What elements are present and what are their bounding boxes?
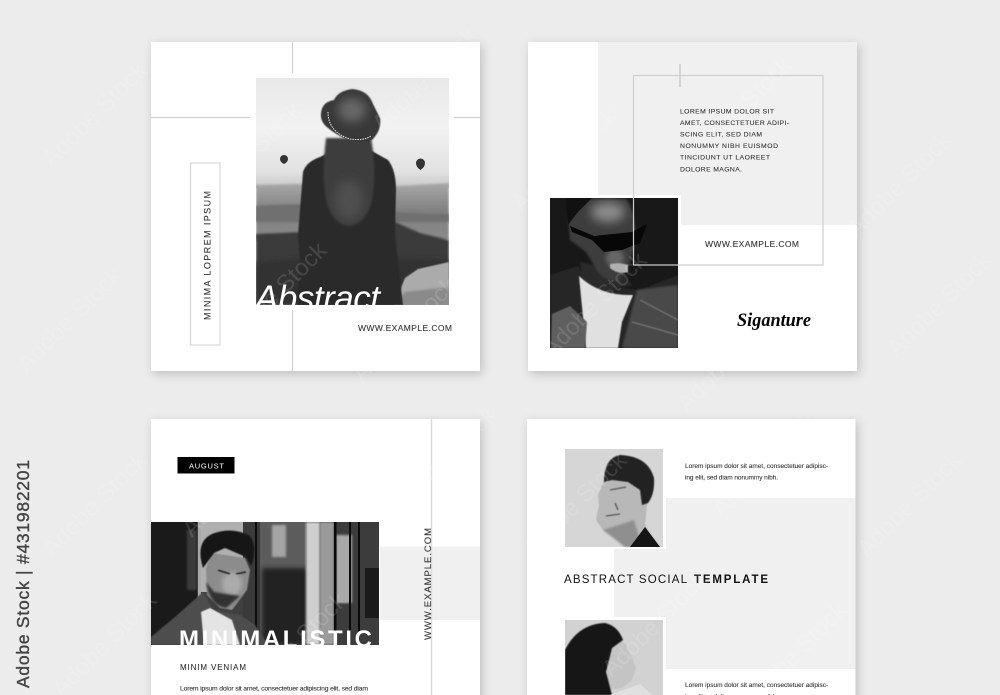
panel: card 3 minimalistic xyxy=(151,419,480,695)
frame with text xyxy=(634,64,823,265)
watermark pattern: Adobe Stock xyxy=(537,246,653,362)
heading: MINIMALISTIC: MINIMALISTIC xyxy=(179,626,372,653)
stock id credit: Adobe Stock | #431982201 xyxy=(13,460,33,688)
watermark pattern: Adobe Stock xyxy=(37,56,153,172)
photo: woman in profile xyxy=(565,620,663,695)
date tag xyxy=(178,457,234,474)
paragraph: TINCIDUNT UT LAOREET xyxy=(680,154,770,162)
signature: Siganture xyxy=(737,310,812,331)
watermark pattern: Adobe Stock xyxy=(682,51,798,167)
photo: man with sunglasses xyxy=(550,198,678,348)
watermark pattern: Adobe Stock xyxy=(842,126,958,242)
paragraph xyxy=(685,463,828,482)
paragraph xyxy=(680,108,789,174)
watermark pattern: Adobe Stock xyxy=(367,21,483,137)
body text: Lorem ipsum dolor sit amet, consectetuer adipiscing elit, sed diam xyxy=(180,686,368,692)
watermark pattern: Adobe Stock xyxy=(347,271,463,387)
url text: WWW.EXAMPLE.COM xyxy=(705,239,799,249)
paragraph: ing elit, sed diam nonummy nibh. xyxy=(685,474,778,482)
panel: card 1 hat photo post xyxy=(151,42,480,371)
vertical url: WWW.EXAMPLE.COM xyxy=(423,528,434,640)
watermark pattern: Adobe Stock xyxy=(507,101,623,217)
paragraph: SCING ELIT, SED DIAM xyxy=(680,132,762,138)
paragraph: Lorem ipsum dolor sit amet, consectetuer adipisc- xyxy=(685,463,828,470)
photo: man in profile xyxy=(565,449,663,547)
paragraph xyxy=(685,682,828,695)
url text: WWW.EXAMPLE.COM xyxy=(358,323,452,333)
icon: right balloon xyxy=(416,158,425,170)
paragraph: LOREM IPSUM DOLOR SIT xyxy=(680,108,774,116)
watermark pattern: Adobe Stock xyxy=(597,566,713,682)
paragraph: AMET, CONSECTETUER ADIPI- xyxy=(680,120,789,127)
heading: abstract social template: ABSTRACT SOCIAL xyxy=(564,574,688,586)
paragraph: DOLORE MAGNA. xyxy=(680,166,742,174)
watermark pattern: Adobe Stock xyxy=(707,406,823,522)
icon: left balloon xyxy=(280,155,288,164)
watermark pattern: Adobe Stock xyxy=(387,401,503,517)
watermark pattern: Adobe Stock xyxy=(882,246,998,362)
heading: Abstract: Abstract xyxy=(253,279,381,318)
paragraph: NONUMMY NIBH EUISMOD xyxy=(680,143,778,150)
date tag: AUGUST xyxy=(189,462,224,470)
heading: abstract social template: TEMPLATE xyxy=(694,574,768,586)
vertical label box xyxy=(190,163,220,345)
heading: abstract social template xyxy=(564,574,768,586)
watermark pattern: Adobe Stock xyxy=(852,446,968,562)
watermark pattern: Adobe Stock xyxy=(217,236,333,352)
watermark pattern: Adobe Stock xyxy=(517,446,633,562)
watermark pattern: Adobe Stock xyxy=(12,261,128,377)
watermark pattern: Adobe Stock xyxy=(177,426,293,542)
photo: man in city xyxy=(151,522,379,653)
panel: card 2 portrait with sunglasses xyxy=(528,42,857,371)
vertical label box: MINIMA LOPREM IPSUM xyxy=(202,191,212,320)
photo: woman in hat overlooking valley xyxy=(253,78,449,318)
watermark pattern: Adobe Stock xyxy=(672,301,788,417)
subheading: MINIM VENIAM xyxy=(180,663,246,672)
paragraph: Lorem ipsum dolor sit amet, consectetuer adipisc- xyxy=(685,682,828,689)
watermark pattern: Adobe Stock xyxy=(192,96,308,212)
panel: card 4 abstract social template xyxy=(527,419,856,695)
watermark pattern: Adobe Stock xyxy=(37,446,153,562)
